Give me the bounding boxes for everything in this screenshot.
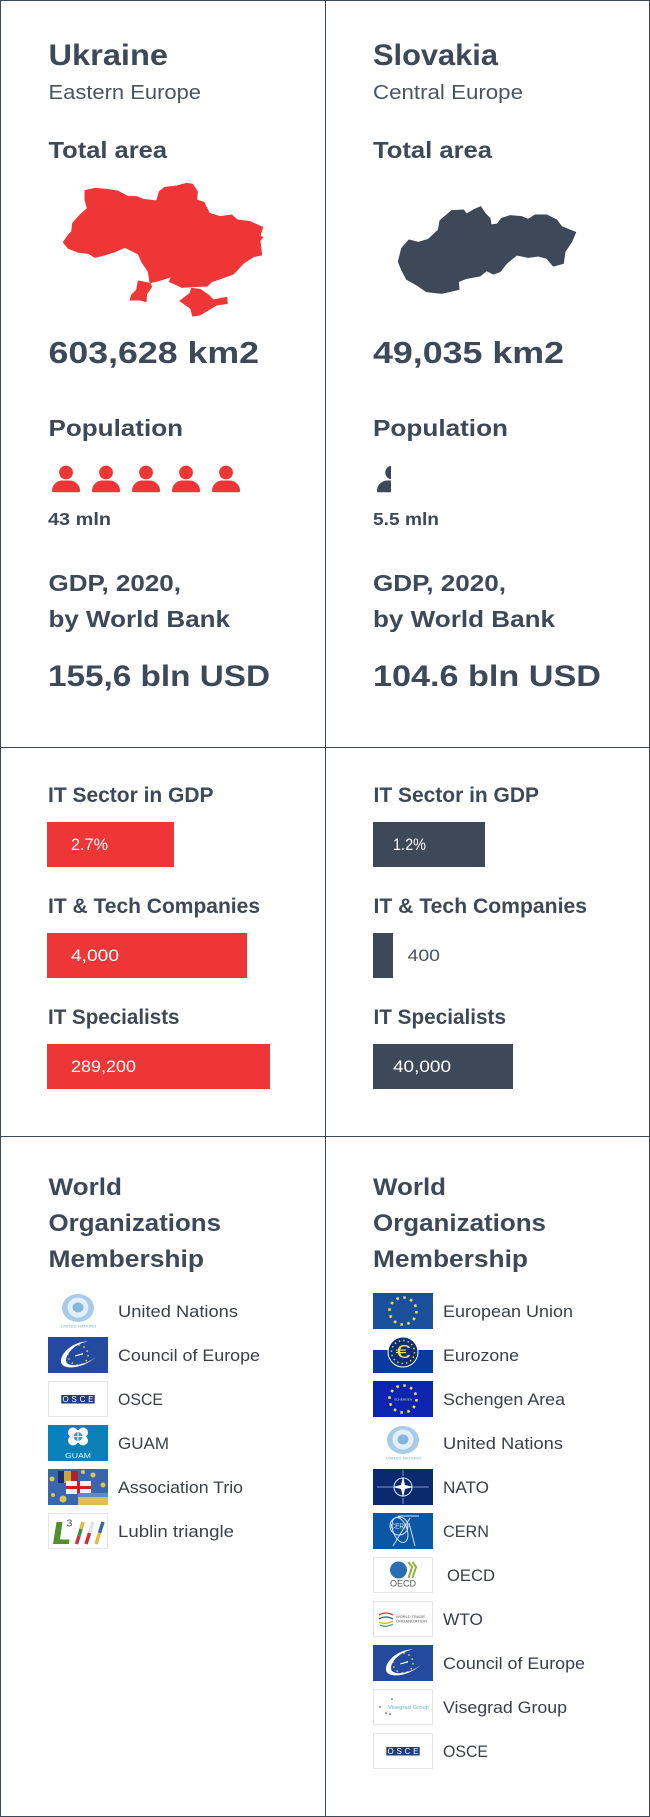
stat: Ukraine population: 43 mln — [48, 509, 111, 529]
logo: United Nations: UNITED NATIONS — [61, 1324, 97, 1328]
heading: memberships: Membership — [48, 1246, 204, 1273]
panel: Ukraine IT bars — [47, 784, 270, 1089]
label: Schengen Area: Schengen Area — [443, 1391, 566, 1409]
subtitle: Central Europe: Central Europe — [373, 82, 523, 104]
bar: specialists 40,000 — [373, 1044, 513, 1089]
heading: memberships: Organizations — [48, 1210, 221, 1237]
panel: Ukraine overview — [48, 39, 270, 693]
logo: GUAM — [48, 1425, 108, 1461]
logo: OECD: OECD — [390, 1578, 416, 1588]
logo: OSCE — [374, 1734, 432, 1768]
heading: GDP: by World Bank — [48, 606, 231, 632]
subtitle: Eastern Europe: Eastern Europe — [48, 82, 201, 104]
logo: Visegrad Group: Visegrad Group — [388, 1705, 429, 1711]
heading: GDP — [48, 570, 231, 632]
label: OSCE: OSCE — [443, 1743, 488, 1761]
heading: population: Population — [373, 415, 508, 441]
bar: IT sector 2.7%: 2.7% — [71, 835, 108, 854]
stat: Slovakia population: 5.5 mln — [373, 509, 439, 529]
logo: United Nations — [386, 1426, 422, 1460]
label: Lublin triangle: Lublin triangle — [118, 1523, 234, 1541]
heading: GDP — [373, 570, 556, 632]
logo: Council of Europe — [373, 1645, 433, 1681]
heading: specialists: IT Specialists — [374, 1006, 506, 1029]
heading: population: Population — [48, 415, 183, 441]
panel: Slovakia IT bars — [373, 784, 587, 1089]
logo: OECD — [374, 1558, 432, 1592]
logo: WTO: ORGANIZATION — [396, 1620, 427, 1624]
bar: companies 4,000 — [47, 933, 247, 978]
icons: population people — [52, 466, 240, 492]
panel: Slovakia memberships — [373, 1174, 585, 1768]
logo: CERN — [373, 1513, 433, 1549]
logo: Lublin triangle: 3 — [66, 1518, 72, 1530]
heading: companies: IT & Tech Companies — [374, 895, 587, 918]
logo: NATO — [373, 1469, 433, 1505]
logo: Council of Europe — [48, 1337, 108, 1373]
label: WTO: WTO — [443, 1611, 483, 1629]
heading: memberships: Membership — [373, 1246, 528, 1273]
logo: Lublin triangle — [48, 1514, 108, 1548]
label: CERN: CERN — [443, 1523, 489, 1541]
bar: specialists 40,000: 40,000 — [393, 1057, 451, 1076]
stat: Slovakia area: 49,035 km2 — [373, 335, 564, 370]
label: Association Trio: Association Trio — [118, 1479, 243, 1497]
label: United Nations: United Nations — [443, 1435, 563, 1453]
label: GUAM: GUAM — [118, 1435, 169, 1453]
heading: memberships: Organizations — [373, 1210, 546, 1237]
bar: specialists 289,200 — [47, 1044, 270, 1089]
title: Slovakia: Slovakia — [373, 39, 498, 72]
heading: memberships: World — [48, 1174, 122, 1201]
heading: memberships — [373, 1174, 546, 1273]
heading: total area: Total area — [373, 137, 493, 163]
label: Council of Europe: Council of Europe — [443, 1655, 585, 1673]
logo: United Nations — [61, 1294, 97, 1328]
bar: specialists 289,200: 289,200 — [71, 1057, 136, 1076]
heading: GDP: by World Bank — [373, 606, 556, 632]
logo: OSCE — [48, 1382, 108, 1416]
logo: WTO — [374, 1602, 432, 1636]
heading: IT sector: IT Sector in GDP — [374, 784, 539, 807]
bar: IT sector 1.2% — [373, 822, 485, 867]
bar: IT sector 2.7% — [47, 822, 174, 867]
label: OECD: OECD — [447, 1567, 495, 1585]
logo: GUAM: GUAM — [65, 1451, 91, 1460]
heading: memberships — [48, 1174, 221, 1273]
heading: specialists: IT Specialists — [48, 1006, 180, 1029]
logo: CERN: CERN — [390, 1524, 408, 1530]
bar: IT sector 1.2%: 1.2% — [393, 835, 426, 854]
logo: United Nations: UNITED NATIONS — [386, 1456, 422, 1460]
logo: OSCE: OSCE — [388, 1747, 418, 1756]
label: OSCE: OSCE — [118, 1391, 163, 1409]
label: Eurozone: Eurozone — [443, 1347, 519, 1365]
stat: Ukraine GDP: 155,6 bln USD — [48, 660, 270, 693]
logo: European Union — [373, 1293, 433, 1329]
logo: Schengen Area: SCHENGEN — [394, 1398, 412, 1402]
logo: WTO: WORLD TRADE — [396, 1615, 426, 1619]
label: Council of Europe: Council of Europe — [118, 1347, 260, 1365]
heading: total area: Total area — [48, 137, 168, 163]
heading: memberships: World — [373, 1174, 446, 1201]
label: Visegrad Group: Visegrad Group — [443, 1699, 567, 1717]
stat: Ukraine area: 603,628 km2 — [48, 335, 259, 370]
bar: companies 400: 400 — [408, 946, 440, 965]
heading: GDP: GDP, 2020, — [48, 570, 181, 596]
stat: Slovakia GDP: 104.6 bln USD — [373, 660, 601, 693]
panel: Slovakia overview — [373, 39, 601, 693]
icon: partial person — [377, 466, 391, 492]
label: NATO: NATO — [443, 1479, 489, 1497]
logo: Visegrad Group — [374, 1690, 432, 1724]
heading: GDP: GDP, 2020, — [373, 570, 506, 596]
panel: Ukraine memberships — [48, 1174, 260, 1548]
logo: Eurozone: € — [396, 1342, 410, 1362]
label: United Nations: United Nations — [118, 1303, 238, 1321]
map: Slovakia — [398, 207, 576, 293]
bar: companies 400 — [373, 933, 440, 978]
logo: Eurozone — [373, 1336, 433, 1373]
heading: companies: IT & Tech Companies — [48, 895, 260, 918]
bar: companies 4,000: 4,000 — [71, 946, 119, 965]
heading: IT sector: IT Sector in GDP — [48, 784, 214, 807]
map: Ukraine — [63, 183, 263, 316]
label: European Union: European Union — [443, 1303, 573, 1321]
logo: OSCE: OSCE — [62, 1395, 94, 1404]
title: Ukraine: Ukraine — [48, 39, 168, 72]
logo: Schengen Area — [373, 1381, 433, 1417]
logo: Association Trio — [48, 1469, 108, 1505]
